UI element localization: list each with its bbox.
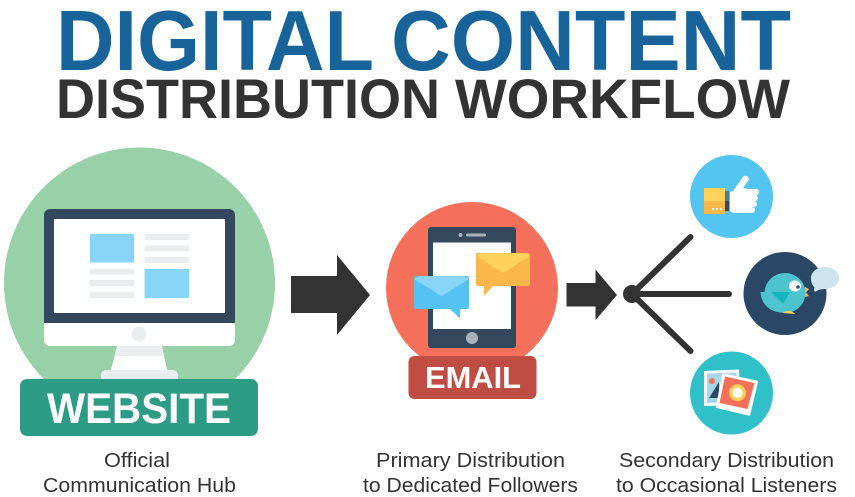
title line 2: DISTRIBUTION <box>56 67 440 130</box>
caption: email: Primary Distribution <box>376 450 565 472</box>
website badge <box>20 379 258 436</box>
caption: social channels <box>616 450 837 497</box>
title line 2: WORKFLOW <box>455 67 790 130</box>
website icon: monitor in green circle <box>4 148 275 418</box>
email badge <box>408 356 536 399</box>
icon: orange envelope <box>476 253 530 296</box>
caption: email: to Dedicated Followers <box>363 475 578 497</box>
email badge: EMAIL <box>425 360 521 395</box>
arrow: website to email <box>291 255 370 335</box>
speech bubble <box>811 267 839 292</box>
caption: website: Official <box>104 450 170 472</box>
email icon: phone with envelopes <box>386 202 558 374</box>
title line 1 <box>56 0 791 89</box>
branching connector <box>623 237 729 351</box>
icon: blue envelope <box>414 276 469 318</box>
title <box>56 0 791 130</box>
caption: email <box>363 450 578 497</box>
caption: social channels: to Occasional Listeners <box>616 475 837 497</box>
caption: social channels: Secondary Distribution <box>619 450 834 472</box>
caption: website: Communication Hub <box>43 475 236 497</box>
caption: website <box>43 450 236 497</box>
arrow: email to secondary channels <box>566 270 617 320</box>
title line 2 <box>56 67 790 130</box>
icon: bird with speech bubble <box>744 252 839 335</box>
icon: social like <box>690 155 773 238</box>
icon: photos <box>690 352 773 434</box>
website badge: WEBSITE <box>47 385 231 433</box>
